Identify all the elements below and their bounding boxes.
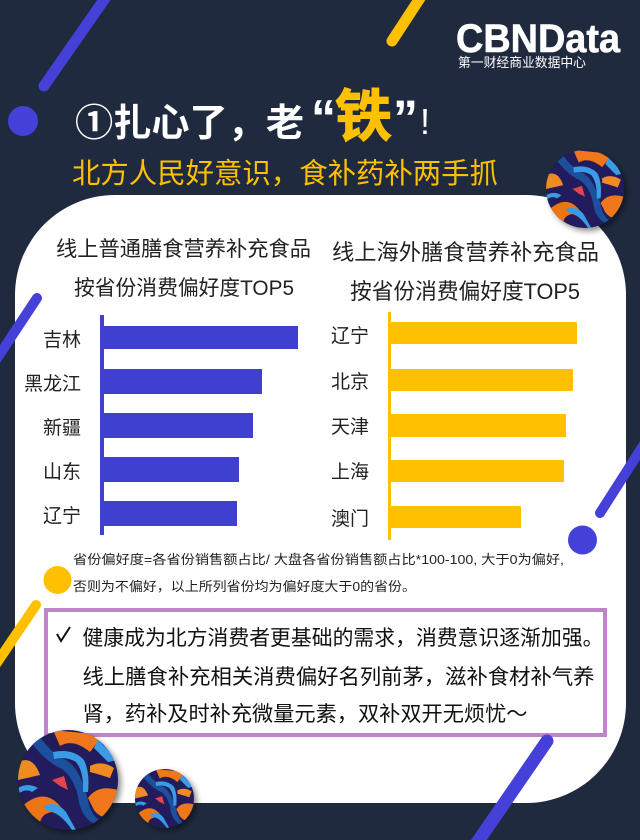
- bar: 黑龙江: [24, 369, 262, 395]
- CBNData logo: 第一财经商业数据中心: [458, 55, 586, 70]
- bar: 新疆: [43, 413, 253, 439]
- decorative blue dot: [8, 106, 38, 136]
- decorative pattern circle bottom small: [135, 769, 194, 828]
- CBNData logo: CBNData: [456, 17, 621, 61]
- bar: 天津: 天津: [331, 416, 369, 438]
- footnote: [73, 552, 564, 594]
- bar: 北京: [331, 369, 573, 393]
- white content panel: [15, 195, 626, 803]
- decorative pattern circle bottom left large: [18, 730, 118, 830]
- bar: 北京: 北京: [331, 371, 369, 393]
- left chart heading: [56, 237, 311, 300]
- bar chart: regular dietary supplements: [24, 315, 298, 535]
- callout box: [46, 610, 605, 735]
- bar: 天津: [331, 414, 566, 438]
- decorative blue dot right: [568, 526, 597, 554]
- title: “: [311, 90, 336, 146]
- footnote: 省份偏好度=各省份销售额占比/ 大盘各省份销售额占比*100-100, 大于0为偏好,: [73, 552, 564, 567]
- bar: 澳门: 澳门: [331, 508, 369, 530]
- decorative yellow line left: [0, 605, 36, 670]
- left chart heading: 线上普通膳食营养补充食品: [56, 237, 311, 261]
- bar: 辽宁: 辽宁: [43, 505, 81, 527]
- decorative blue line right: [600, 438, 640, 513]
- callout text: 肾，药补及时补充微量元素，双补双开无烦忧～: [82, 703, 528, 726]
- title: !: [420, 101, 430, 142]
- footnote: 否则为不偏好，以上所列省份均为偏好度大于0的省份。: [73, 579, 416, 594]
- callout text: 线上膳食补充相关消费偏好名列前茅，滋补食材补气养: [82, 666, 594, 689]
- bar: 澳门: [331, 506, 521, 530]
- callout text: [82, 627, 604, 726]
- title: 铁: [335, 85, 392, 149]
- decorative pattern circle top right: [546, 150, 624, 228]
- right chart heading: [332, 240, 599, 304]
- decorative blue line top left: [44, 0, 108, 86]
- bar: 山东: 山东: [43, 461, 81, 483]
- left chart heading: 按省份消费偏好度TOP5: [74, 276, 294, 300]
- title: [75, 85, 430, 149]
- bar: 辽宁: 辽宁: [331, 325, 369, 347]
- callout text: 健康成为北方消费者更基础的需求，消费意识逐渐加强。: [82, 627, 604, 650]
- right chart heading: 线上海外膳食营养补充食品: [332, 240, 599, 265]
- right chart heading: 按省份消费偏好度TOP5: [350, 279, 580, 304]
- bar chart: overseas dietary supplements: [331, 312, 577, 540]
- subtitle: 北方人民好意识，食补药补两手抓: [72, 158, 498, 190]
- bar: 吉林: [43, 326, 298, 351]
- decorative blue line bottom right: [472, 741, 547, 840]
- bar: 新疆: 新疆: [43, 417, 81, 439]
- bar: 上海: 上海: [331, 461, 369, 483]
- title: ①扎心了，老: [75, 103, 304, 145]
- bar: 上海: [331, 460, 564, 483]
- bar: 辽宁: [43, 501, 237, 527]
- bar: 黑龙江: 黑龙江: [24, 373, 81, 395]
- decorative blue line left: [0, 298, 37, 366]
- check mark icon: [57, 627, 70, 641]
- decorative yellow dot left: [44, 566, 72, 594]
- decorative yellow line top: [392, 0, 424, 41]
- bar: 山东: [43, 457, 239, 483]
- bar: 吉林: 吉林: [43, 329, 81, 351]
- title: ”: [393, 90, 418, 146]
- bar: 辽宁: [331, 322, 577, 347]
